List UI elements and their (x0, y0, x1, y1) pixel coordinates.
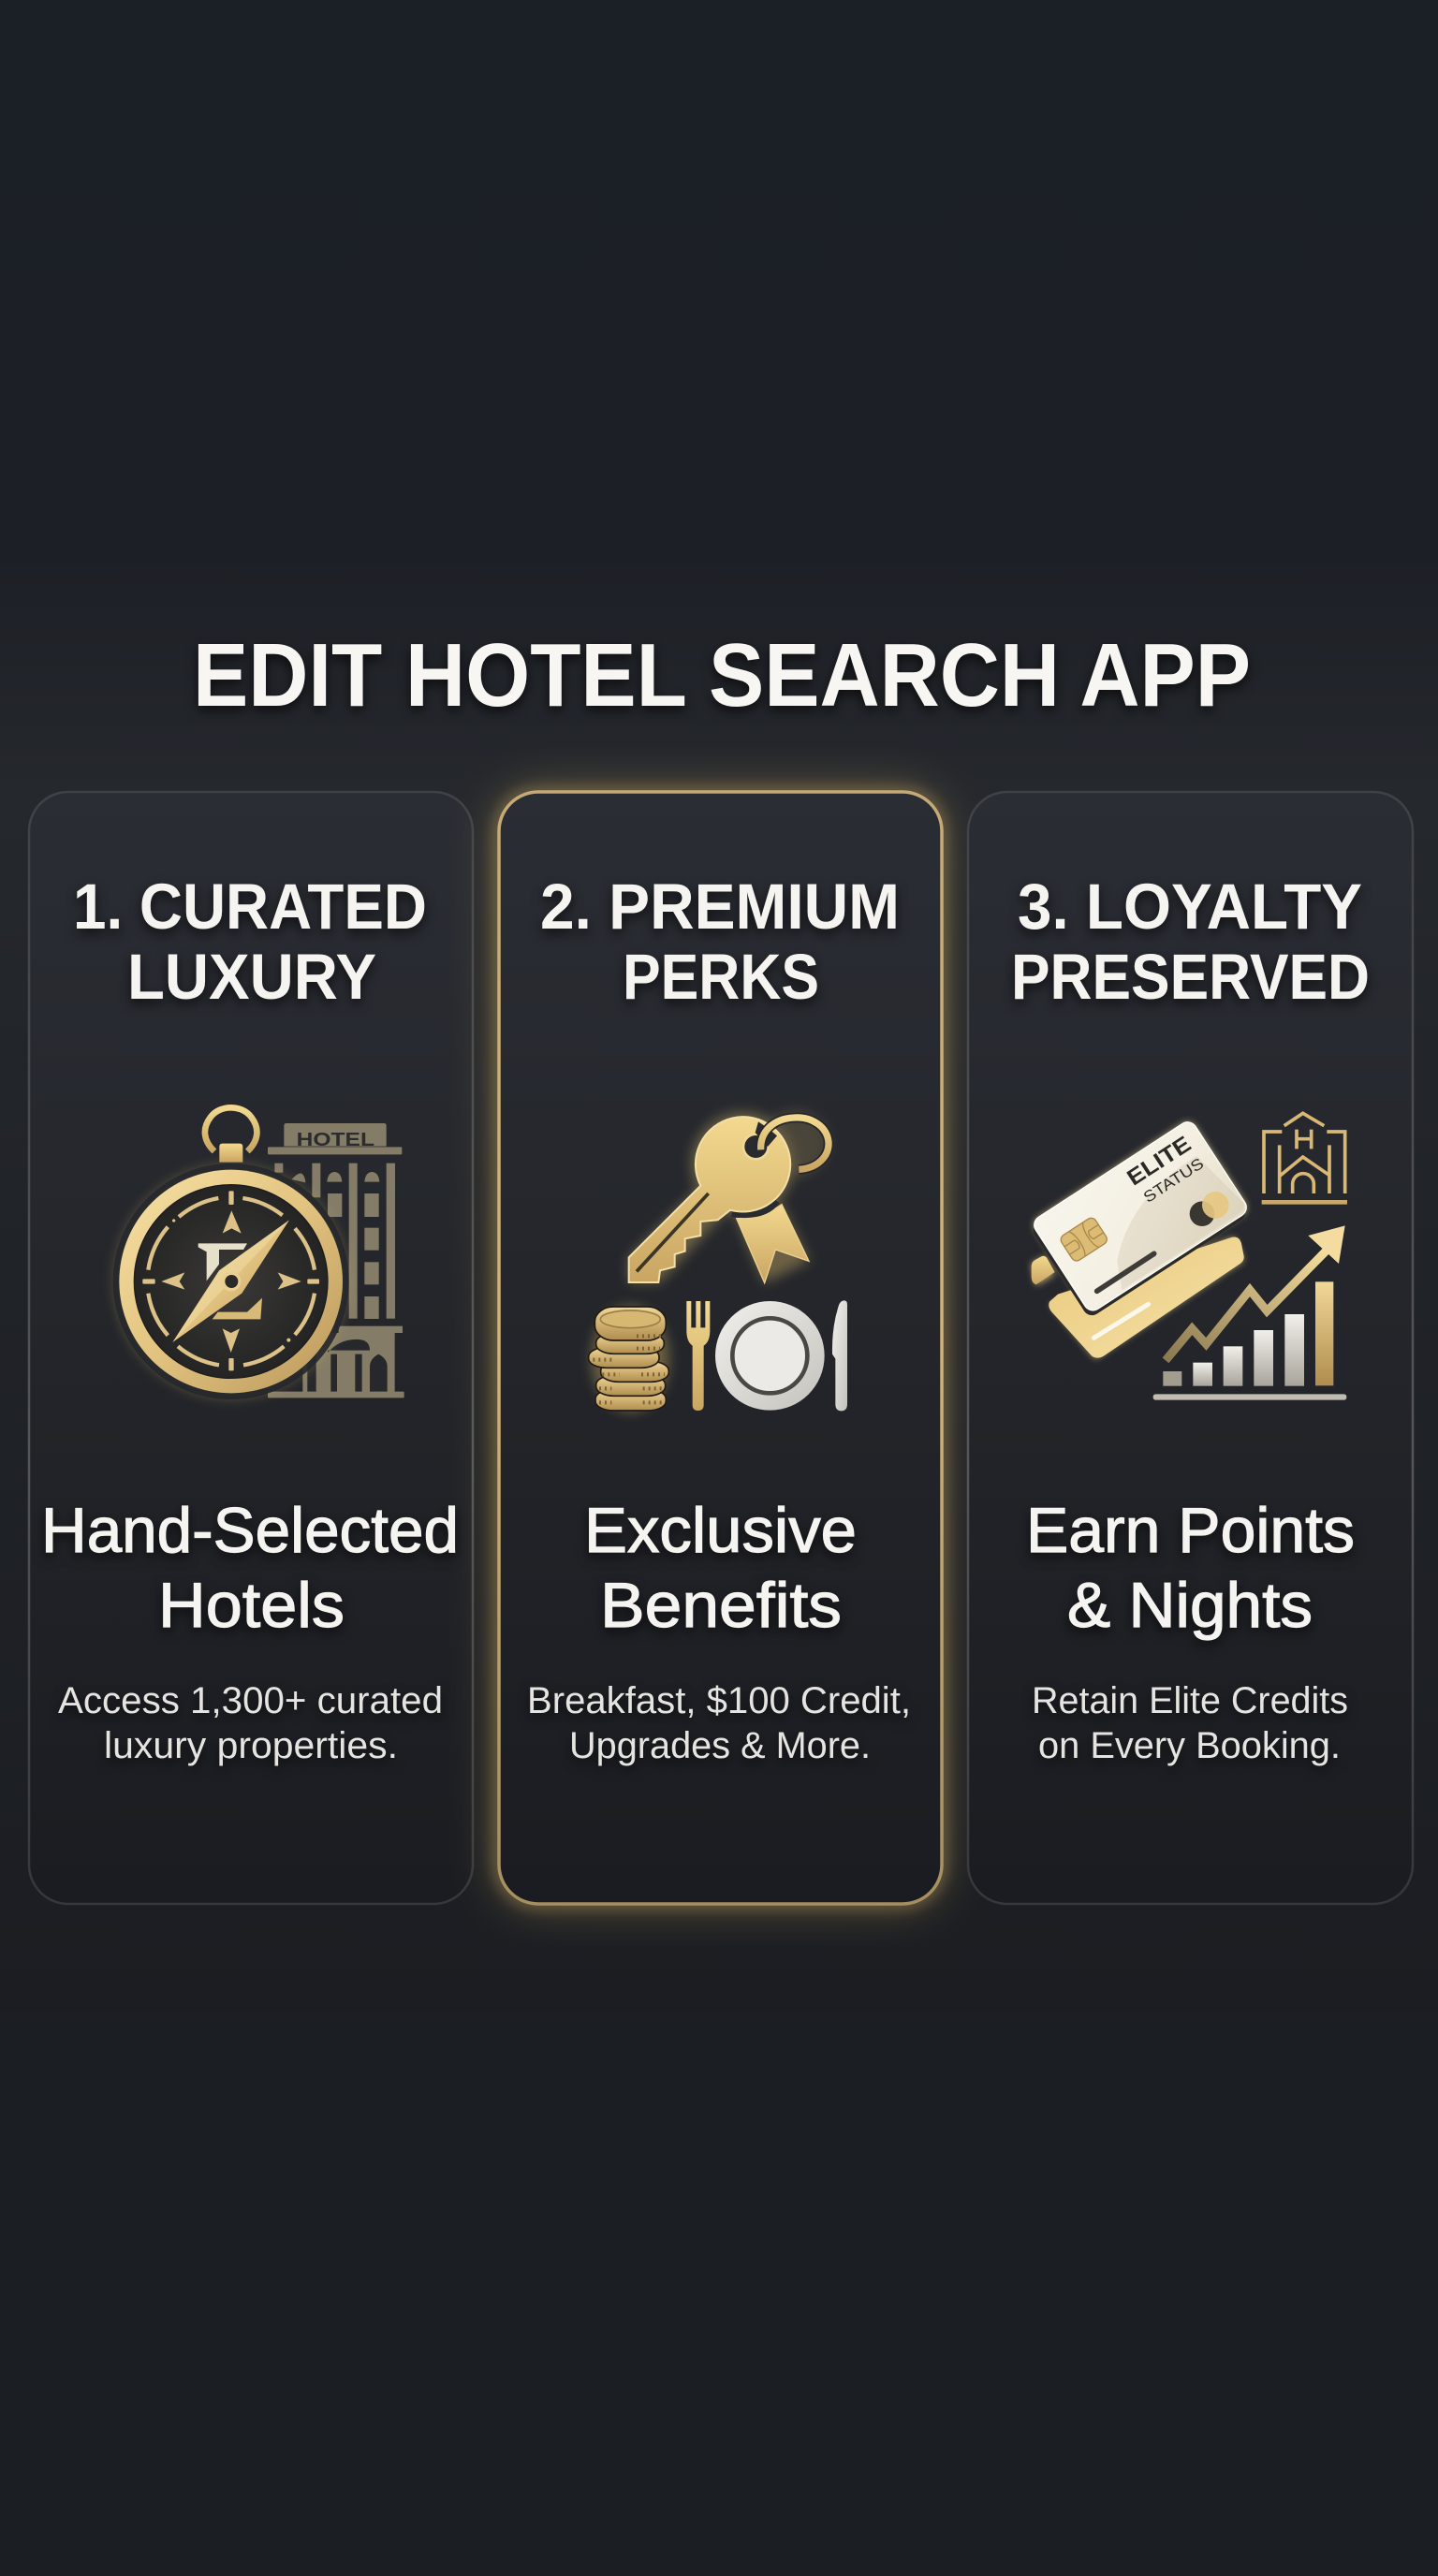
subheading: earn points and nights: Earn Points (1026, 1495, 1355, 1566)
heading: premium perks: PERKS (623, 941, 819, 1013)
compass dial markings (142, 1191, 319, 1370)
icon: fork (686, 1301, 710, 1411)
icon: hotel building (268, 1123, 404, 1398)
subheading: earn points and nights (1026, 1495, 1355, 1641)
coin reeding (593, 1336, 665, 1402)
heading: premium perks: 2. PREMIUM (540, 871, 900, 943)
icon: hotel outline (1262, 1113, 1347, 1205)
compass ring and bail (119, 1107, 343, 1393)
icon glow (592, 1111, 829, 1412)
description: premium perks: Breakfast, $100 Credit, (527, 1680, 911, 1721)
subheading: exclusive benefits (584, 1495, 857, 1641)
panel: premium perks (498, 792, 942, 1904)
description: curated luxury (58, 1680, 443, 1766)
description: loyalty preserved: Retain Elite Credits (1032, 1680, 1348, 1721)
icon: growth arrow (1166, 1225, 1345, 1360)
description: curated luxury: luxury properties. (104, 1725, 398, 1766)
subheading: exclusive benefits: Benefits (600, 1570, 842, 1641)
subheading: hand-selected hotels (41, 1495, 459, 1641)
heading: premium perks (540, 871, 900, 1013)
description: loyalty preserved: on Every Booking. (1038, 1725, 1341, 1766)
bar chart (1153, 1281, 1346, 1400)
icon: key, ribbon, coins, place setting (589, 1111, 847, 1412)
compass glow (114, 1164, 348, 1398)
card glow (1031, 1119, 1250, 1359)
subheading: exclusive benefits: Exclusive (584, 1495, 857, 1566)
icon: elite card, hotel, growth chart (1030, 1113, 1347, 1400)
subheading: hand-selected hotels: Hotels (158, 1570, 345, 1641)
heading: curated luxury (73, 871, 427, 1013)
compass needle (172, 1220, 289, 1342)
heading: curated luxury: LUXURY (127, 941, 376, 1013)
subheading: hand-selected hotels: Hand-Selected (41, 1495, 459, 1566)
icon: key (629, 1117, 790, 1282)
icon: coin stack (589, 1307, 668, 1411)
title: EDIT HOTEL SEARCH APP (193, 625, 1251, 725)
icon: knife (832, 1300, 847, 1411)
description: premium perks: Upgrades & More. (569, 1725, 871, 1766)
icon: plate (715, 1301, 825, 1411)
panel: curated luxury (29, 792, 473, 1904)
heading: loyalty preserved: PRESERVED (1011, 941, 1370, 1013)
card chip (1059, 1216, 1109, 1263)
card label: STATUS (1140, 1154, 1207, 1207)
card label: ELITE (1123, 1132, 1196, 1191)
description: loyalty preserved (1032, 1680, 1348, 1766)
description: premium perks (527, 1680, 911, 1766)
heading: curated luxury: 1. CURATED (73, 871, 427, 943)
back gold card (1030, 1123, 1249, 1358)
icon: key ring (761, 1118, 829, 1169)
icon: compass and hotel (113, 1107, 404, 1399)
icon: ribbon (737, 1205, 809, 1283)
front elite status card (1031, 1119, 1250, 1314)
heading: loyalty preserved: 3. LOYALTY (1018, 871, 1362, 943)
icon: hotel building: HOTEL (297, 1129, 374, 1150)
heading: loyalty preserved (1011, 871, 1370, 1013)
card label (1123, 1132, 1207, 1207)
subheading: earn points and nights: & Nights (1067, 1570, 1313, 1641)
card logo (1190, 1192, 1229, 1226)
panel: loyalty preserved (968, 792, 1413, 1904)
compass monogram (198, 1243, 262, 1319)
description: curated luxury: Access 1,300+ curated (58, 1680, 443, 1721)
